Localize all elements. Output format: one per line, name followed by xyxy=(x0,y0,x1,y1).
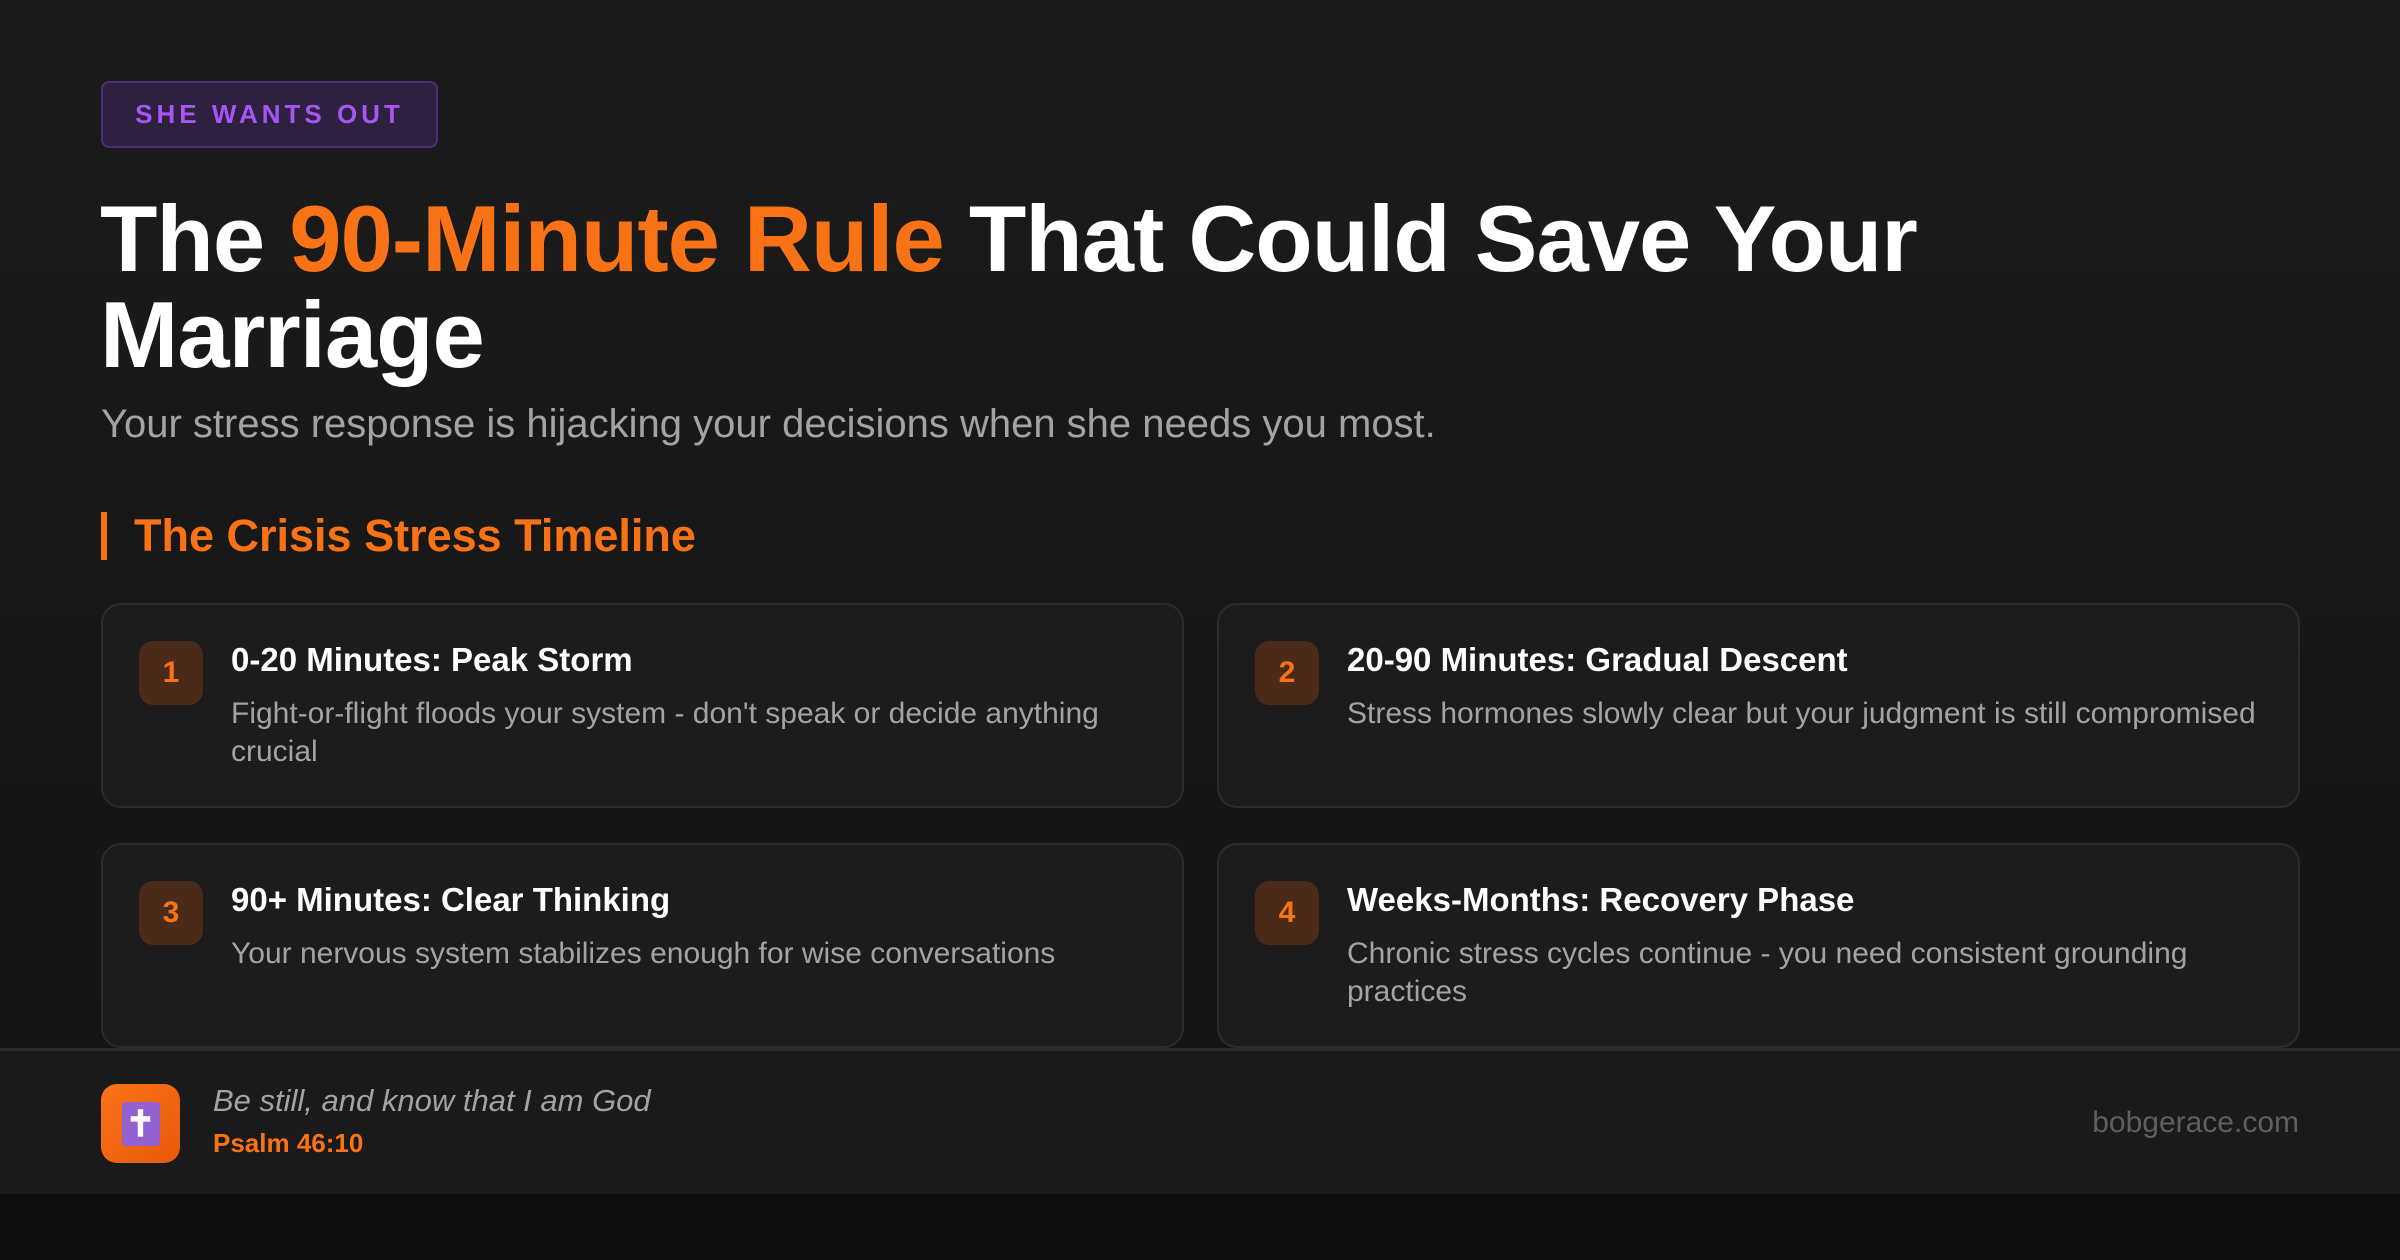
number 3: 3 xyxy=(163,896,179,929)
card 3 title: 90+ Minutes: Clear Thinking xyxy=(231,881,670,918)
number 2 xyxy=(1255,641,1319,705)
card 4 xyxy=(1217,843,2300,1048)
card 1 text: Fight-or-flight floods your system - don't speak or decide anything crucial xyxy=(231,697,1099,768)
card 4 title: Weeks-Months: Recovery Phase xyxy=(1347,881,1854,918)
card 2 title: 20-90 Minutes: Gradual Descent xyxy=(1347,641,1848,678)
website: bobgerace.com xyxy=(2092,1106,2299,1139)
card 2 text: Stress hormones slowly clear but your judgment is still compromised xyxy=(1347,697,2256,730)
number 3 xyxy=(139,881,203,945)
card 4 text: Chronic stress cycles continue - you need consistent grounding practices xyxy=(1347,937,2187,1008)
card 3 text: Your nervous system stabilizes enough for wise conversations xyxy=(231,937,1055,970)
badge: she wants out: SHE WANTS OUT xyxy=(135,99,404,129)
card 1 xyxy=(101,603,1184,808)
number 4 xyxy=(1255,881,1319,945)
title: The 90-Minute Rule That Could Save Your Marriage xyxy=(100,186,1917,387)
number 2: 2 xyxy=(1279,656,1295,689)
card 2 xyxy=(1217,603,2300,808)
number 4: 4 xyxy=(1279,896,1295,929)
footer xyxy=(0,1048,2400,1194)
subtitle: Your stress response is hijacking your decisions when she needs you most. xyxy=(101,402,1436,446)
card 1 title: 0-20 Minutes: Peak Storm xyxy=(231,641,633,678)
number 1 xyxy=(139,641,203,705)
badge: she wants out xyxy=(101,81,438,148)
number 1: 1 xyxy=(163,656,179,689)
card 3 xyxy=(101,843,1184,1048)
quote: Be still, and know that I am God xyxy=(213,1083,651,1118)
reference: Psalm 46:10 xyxy=(213,1128,363,1158)
section heading: The Crisis Stress Timeline xyxy=(134,510,696,561)
icon: cross: ✝ xyxy=(125,1102,156,1144)
icon: cross xyxy=(101,1084,180,1163)
